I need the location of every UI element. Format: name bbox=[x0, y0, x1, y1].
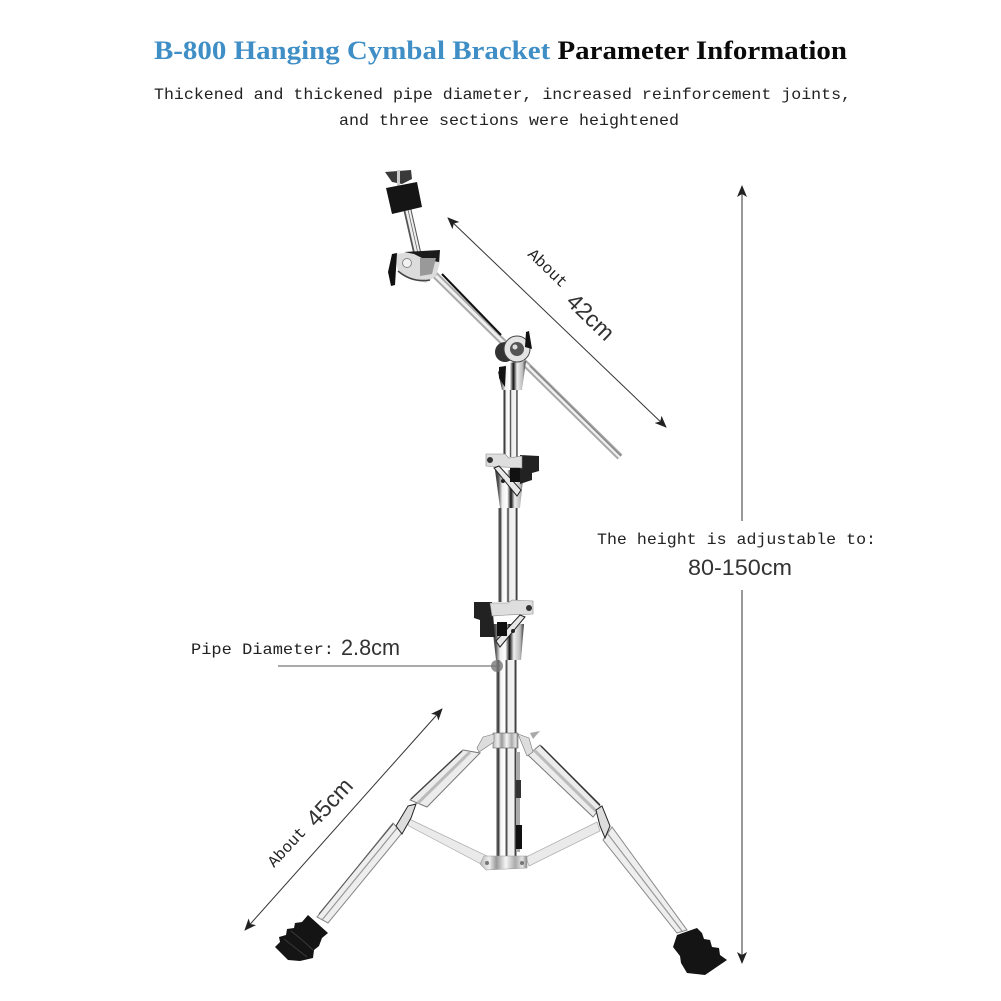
subtitle: and three sections were heightened bbox=[339, 112, 679, 130]
left leg lower bbox=[317, 823, 402, 923]
lower hub bbox=[480, 856, 527, 870]
cymbal felt and rod bbox=[385, 170, 422, 252]
callout: pipe diameter bbox=[191, 635, 503, 672]
left foot bbox=[275, 915, 328, 961]
callout: pipe diameter: 2.8cm bbox=[341, 635, 400, 660]
cymbal stand illustration bbox=[275, 170, 727, 975]
subtitle: Thickened and thickened pipe diameter, increased reinforcement joints, bbox=[154, 86, 851, 104]
left leg upper bbox=[410, 750, 480, 807]
boom arm bbox=[434, 274, 621, 457]
label: about 45cm: 45cm bbox=[301, 773, 358, 831]
arrow: leg length bbox=[245, 709, 442, 930]
label: height: 80-150cm bbox=[688, 555, 792, 580]
right knee joint bbox=[596, 806, 610, 838]
label: about 42cm: About bbox=[524, 246, 571, 292]
upper hub bbox=[477, 731, 540, 756]
right leg lower bbox=[603, 827, 687, 933]
label: about 42cm: 42cm bbox=[562, 288, 620, 346]
title: B-800 Hanging Cymbal Bracket Parameter Information bbox=[154, 36, 848, 65]
arrow: height bbox=[741, 186, 743, 963]
lower collar bbox=[474, 600, 533, 660]
label: about 42cm bbox=[524, 246, 620, 346]
upper collar bbox=[486, 454, 539, 508]
right brace bbox=[526, 822, 600, 866]
subtitle bbox=[154, 86, 851, 130]
left brace bbox=[405, 817, 487, 865]
label: height: The height is adjustable to: bbox=[597, 531, 876, 549]
callout: pipe diameter: Pipe Diameter: bbox=[191, 641, 334, 659]
arrow: boom length bbox=[448, 218, 666, 427]
middle pipe bbox=[498, 508, 518, 602]
left knee joint bbox=[396, 804, 416, 834]
boom joint bbox=[495, 331, 532, 390]
upper pipe bbox=[503, 385, 518, 457]
label: height bbox=[597, 531, 876, 580]
height lever bbox=[516, 752, 522, 852]
boom clamp bbox=[388, 250, 440, 286]
right leg upper bbox=[528, 745, 601, 817]
lower pipe bbox=[496, 660, 517, 858]
right foot bbox=[673, 928, 727, 975]
label: about 45cm: About bbox=[264, 824, 310, 871]
label: about 45cm bbox=[264, 773, 358, 871]
